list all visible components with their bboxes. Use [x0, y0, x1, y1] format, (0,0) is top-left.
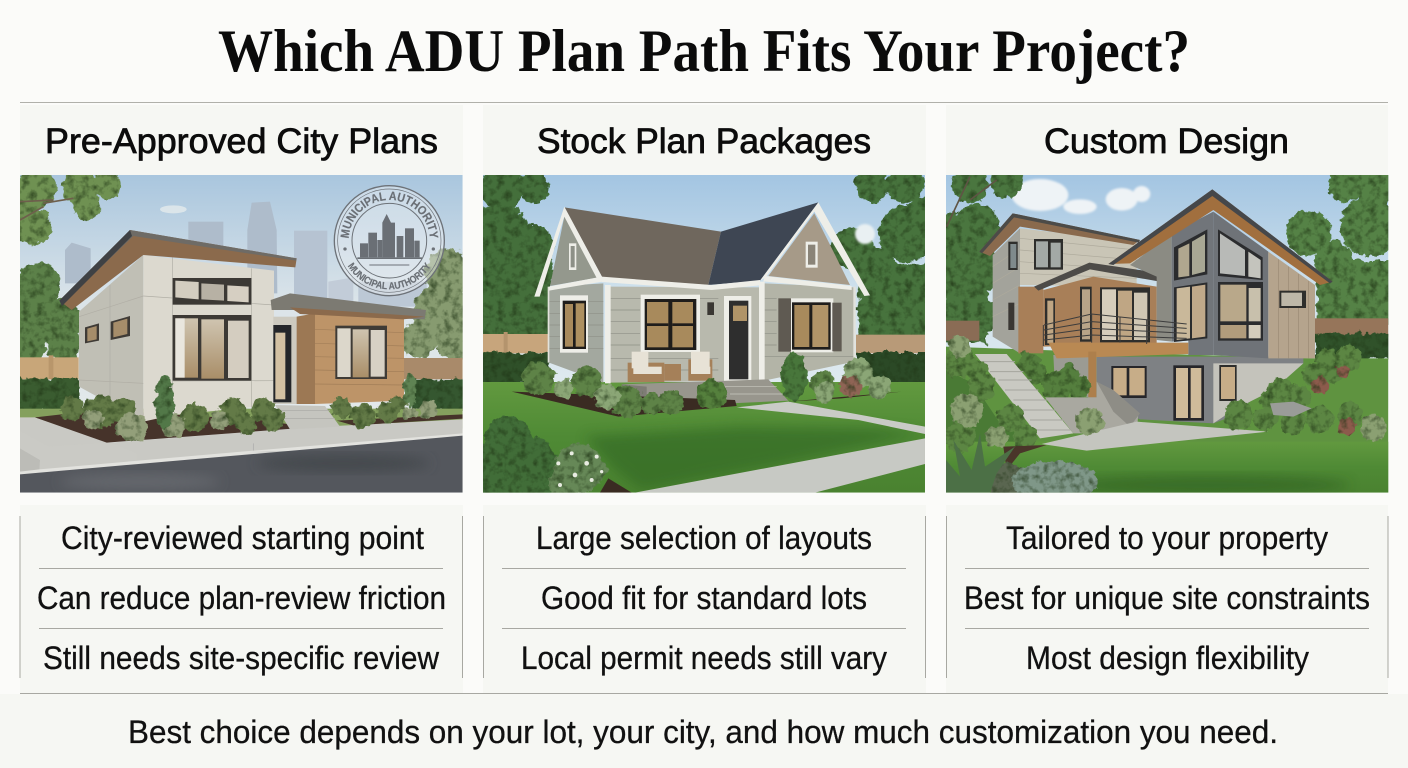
- shrubs behind stairs: [1017, 352, 1091, 401]
- wing window: [335, 326, 387, 379]
- path: [737, 402, 925, 434]
- railing: [1043, 314, 1187, 346]
- mulch bed: [35, 412, 290, 443]
- fence: [946, 321, 979, 341]
- fence: [20, 357, 79, 379]
- grass and ground: [20, 409, 463, 429]
- illustration: traditional gabled cottage: [469, 167, 935, 497]
- main window: [173, 315, 251, 381]
- street: [20, 436, 463, 493]
- benefit list: custom design: Best for unique site constraints: [964, 580, 1370, 616]
- entry: [273, 317, 297, 404]
- steps: [275, 405, 340, 429]
- heading: custom design: Custom Design: [1044, 122, 1289, 161]
- wood bay: [1043, 277, 1157, 347]
- plantings: [60, 373, 438, 442]
- skyline: [65, 202, 427, 307]
- benefit list: custom design: Most design flexibility: [1026, 640, 1309, 676]
- walls: [549, 283, 603, 383]
- slope: [946, 347, 1388, 493]
- trees: [20, 175, 463, 360]
- side windows: [85, 323, 99, 343]
- large windows: [1174, 229, 1207, 281]
- benefit list: stock plans: Good fit for standard lots: [541, 580, 867, 616]
- heading: pre-approved city plans: Pre-Approved City Plans: [45, 122, 438, 161]
- footer takeaway: Best choice depends on your lot, your city, and how much customization you need.: [128, 714, 1278, 750]
- gable volume: [1130, 233, 1172, 342]
- benefit list: custom design: [946, 516, 1388, 678]
- wood wing: [297, 313, 315, 404]
- benefit list: custom design: Tailored to your property: [1006, 520, 1328, 556]
- panel: stock plan packages: [469, 122, 935, 678]
- lower level: [1097, 357, 1303, 423]
- stamp: municipal authority: MUNICIPAL AUTHORITY: [340, 192, 438, 238]
- benefit list: stock plans: Large selection of layouts: [536, 520, 872, 556]
- right gable: [768, 213, 850, 285]
- panel: custom design: [943, 122, 1400, 678]
- shed roof: [59, 230, 297, 310]
- benefit list: pre-approved: Can reduce plan-review friction: [37, 580, 446, 616]
- door: [724, 296, 751, 381]
- heading: stock plan packages: Stock Plan Packages: [537, 122, 871, 161]
- clouds: [1012, 179, 1150, 214]
- fence: [483, 334, 548, 353]
- deck: [1048, 343, 1188, 358]
- foreground plants: [1003, 445, 1047, 470]
- illustration: modern ADU with city skyline: [20, 175, 463, 493]
- shrubs: [522, 353, 891, 418]
- stamp: municipal authority: [334, 185, 445, 296]
- vents: [569, 243, 576, 270]
- benefit list: pre-approved: [20, 516, 462, 678]
- trees: [943, 164, 1400, 343]
- chairs: [628, 363, 664, 382]
- stamp: municipal authority: MUNICIPAL AUTHORITY: [348, 262, 430, 290]
- benefit list: stock plans: Local permit needs still vary: [521, 640, 887, 676]
- hedge: [17, 378, 80, 411]
- porch: [622, 379, 788, 403]
- roof: [564, 207, 721, 285]
- hedge: [480, 353, 550, 383]
- retaining wall: [1045, 382, 1138, 433]
- benefit list: pre-approved: Still needs site-specific review: [43, 640, 440, 676]
- roof peak: [1108, 189, 1333, 285]
- stairs: [975, 354, 1073, 438]
- upper windows: [173, 278, 251, 305]
- lawn: [483, 382, 925, 493]
- main volume: [79, 255, 143, 422]
- sidewalk: [20, 417, 463, 472]
- patio: [1042, 422, 1268, 451]
- shrubs: [944, 336, 1387, 452]
- left gable: [550, 217, 599, 286]
- left upper volume: [993, 228, 1020, 353]
- trees: [483, 175, 925, 335]
- windows: [560, 295, 588, 353]
- benefit list: pre-approved: City-reviewed starting point: [61, 520, 424, 556]
- benefit list: stock plans: [484, 516, 926, 678]
- mulch: [512, 392, 737, 417]
- foreground shrub: [469, 416, 607, 497]
- panel: pre-approved city plans: [20, 122, 463, 678]
- trim: [605, 285, 611, 383]
- title: Which ADU Plan Path Fits Your Project?: [218, 18, 1190, 84]
- flat roof: [271, 293, 426, 319]
- illustration: custom hillside home: [943, 164, 1400, 502]
